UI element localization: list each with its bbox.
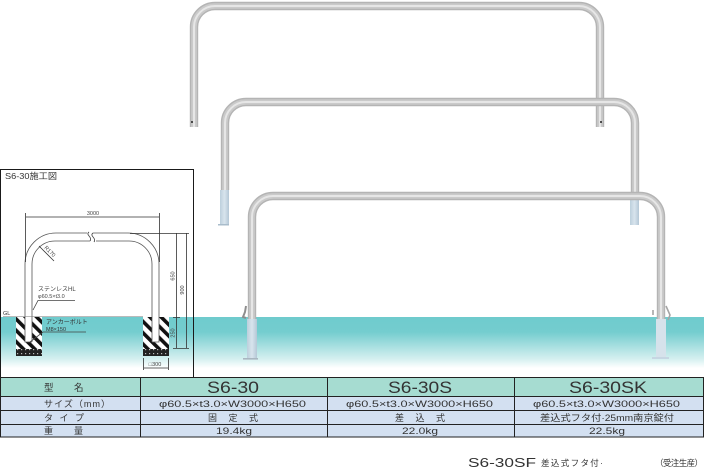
row: weight: 22.5kg <box>589 426 625 436</box>
dimension: heights <box>130 233 189 348</box>
dimension: width 3000: 3000 <box>87 211 99 217</box>
row: type: 固定式 <box>208 412 258 423</box>
row: size <box>44 398 680 409</box>
teal ground band <box>0 317 704 377</box>
label: stainless pipe <box>33 286 76 310</box>
row: model name: S6-30SK <box>569 379 647 397</box>
row: type <box>44 412 674 423</box>
photo: socket bollard with lid S6-30SK <box>243 196 670 360</box>
spec table <box>0 377 704 438</box>
dimension: heights: 250 <box>170 328 176 338</box>
label: anchor bolt <box>30 318 88 342</box>
row: model name: S6-30S <box>388 379 452 397</box>
dimension: foundation 300: □300 <box>149 362 161 368</box>
row: type: タイプ <box>44 413 84 423</box>
label: anchor bolt: M8×150 <box>46 327 66 333</box>
photo: socket bollard S6-30S <box>218 102 639 226</box>
row: model name: S6-30 <box>207 379 259 397</box>
row: type: 差込式フタ付·25mm南京錠付 <box>540 412 674 423</box>
row: weight: 19.4kg <box>216 426 252 436</box>
footnote: S6-30SF: 差込式フタ付· <box>541 458 603 468</box>
row: size: φ60.5×t3.0×W3000×H650 <box>346 399 493 409</box>
dimension: foundation 300 <box>144 358 168 370</box>
footnote: S6-30SF <box>468 455 703 469</box>
row: weight <box>44 425 625 436</box>
label: stainless pipe: φ60.5×t3.0 <box>38 294 65 300</box>
photo: fixed bollard S6-30 <box>191 6 602 127</box>
panel: construction drawing <box>0 170 194 378</box>
label: ground level: GL <box>3 311 10 317</box>
row: model name: 名 <box>74 382 84 394</box>
label: stainless pipe: ステンレスHL <box>38 286 76 293</box>
row: model name <box>44 379 647 397</box>
dimension: heights: 650 <box>170 271 176 281</box>
row: weight: 22.0kg <box>402 426 438 436</box>
row: size: φ60.5×t3.0×W3000×H650 <box>533 399 680 409</box>
dimension: heights: 900 <box>180 285 186 295</box>
label: anchor bolt: アンカーボルト <box>46 318 88 326</box>
row: weight: 量 <box>74 426 83 436</box>
row: weight: 重 <box>44 425 53 436</box>
foundation blocks <box>16 317 169 356</box>
drawing: pipe outline <box>25 232 159 342</box>
footnote: S6-30SF: （受注生産） <box>655 458 703 468</box>
label: ground level <box>3 311 143 317</box>
drawing title: S6-30施工図 <box>5 171 57 181</box>
row: size: サイズ（mm） <box>44 398 110 409</box>
row: type: 差込式 <box>395 412 445 423</box>
label: radius R170 <box>39 245 56 261</box>
row: model name: 型 <box>44 383 54 394</box>
label: radius R170: R170 <box>43 245 56 259</box>
dimension: width 3000 <box>26 211 160 262</box>
row: size: φ60.5×t3.0×W3000×H650 <box>159 399 306 409</box>
